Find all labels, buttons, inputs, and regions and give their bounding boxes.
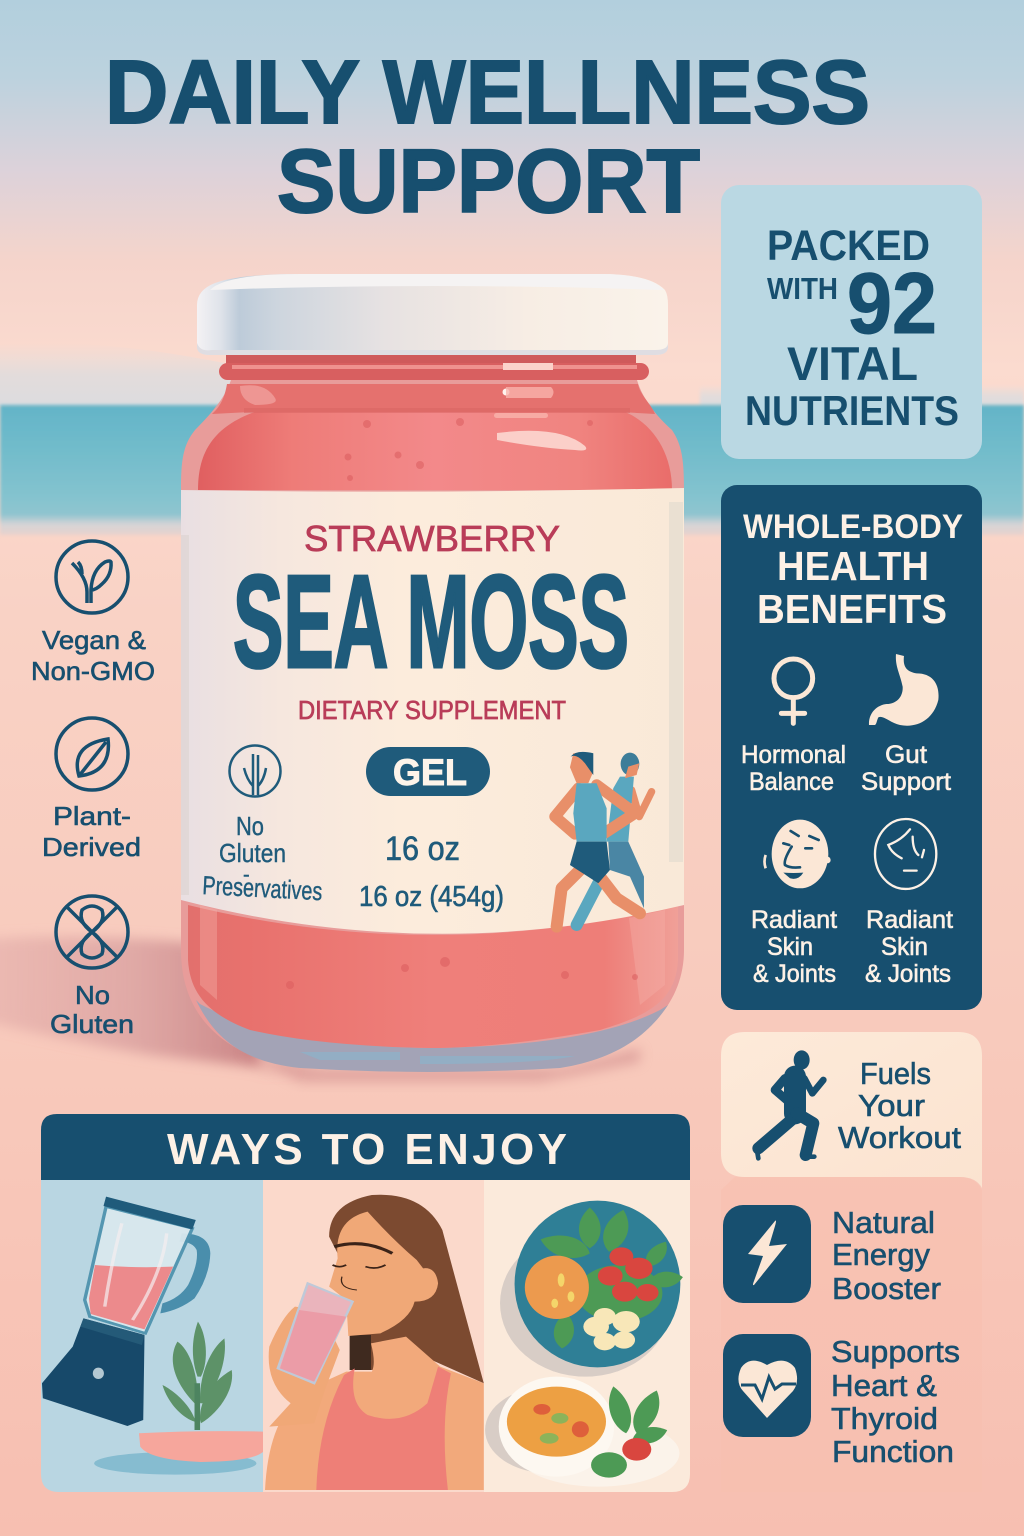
- label: gel pill: [366, 747, 490, 796]
- text: radiant skin and joints right: Radiant: [866, 906, 953, 934]
- badge: no gluten: No: [75, 980, 110, 1010]
- panel: packed with 92 vital nutrients: PACKED: [767, 222, 930, 270]
- icon: smiling face: [764, 820, 831, 888]
- item: natural energy booster: [723, 1205, 941, 1306]
- panel: packed with 92 vital nutrients: NUTRIENTS: [745, 387, 959, 434]
- text: radiant skin and joints right: [865, 906, 953, 988]
- text: gut support: Gut: [885, 741, 927, 769]
- panel: packed with 92 vital nutrients: [721, 185, 982, 459]
- item: supports heart and thyroid function: Supports: [831, 1334, 960, 1369]
- title: DAILY WELLNESS: [105, 43, 870, 143]
- text: radiant skin and joints left: Radiant: [751, 906, 837, 934]
- panel: ways to enjoy: [41, 1114, 690, 1492]
- text: hormonal balance: Balance: [749, 768, 834, 796]
- panel: fuels your workout: Your: [858, 1088, 925, 1123]
- text: radiant skin and joints left: Skin: [767, 933, 813, 961]
- panel: fuels your workout: Workout: [838, 1120, 961, 1155]
- panel: packed with 92 vital nutrients: 92: [847, 256, 937, 352]
- text: radiant skin and joints right: Skin: [881, 933, 928, 961]
- scene: salad plate and soup: [484, 1180, 690, 1492]
- panel heading: HEALTH: [777, 543, 929, 589]
- heading bar: [41, 1114, 690, 1180]
- icon: runner: [757, 1050, 823, 1158]
- badge: vegan and non-gmo: [31, 541, 155, 686]
- jar lid: [197, 274, 668, 355]
- icon: lightning bolt: [723, 1205, 811, 1303]
- badge: no gluten: [50, 896, 134, 1039]
- text: hormonal balance: [741, 741, 846, 796]
- panel: packed with 92 vital nutrients: VITAL: [787, 337, 918, 390]
- badge: no gluten: Gluten: [50, 1009, 134, 1039]
- product label: [181, 488, 684, 934]
- label: net weight: 16 oz (454g): [359, 881, 504, 913]
- scene: woman drinking smoothie: [263, 1180, 484, 1492]
- panel heading: BENEFITS: [757, 586, 947, 632]
- badge: vegan and non-gmo: Vegan &: [42, 625, 146, 655]
- icon: sprout: [56, 541, 128, 613]
- text: radiant skin and joints left: & Joints: [753, 960, 836, 988]
- label: net weight: 16 oz: [385, 830, 460, 868]
- jar neck: [219, 352, 649, 405]
- panel: fuels your workout: Fuels: [860, 1056, 931, 1091]
- icon: stomach: [869, 654, 939, 726]
- label: no gluten preservatives: [202, 811, 323, 906]
- gel highlights: [497, 431, 586, 450]
- label: runners illustration: [555, 752, 652, 927]
- label: no gluten preservatives: Gluten: [219, 838, 286, 868]
- label: strawberry: STRAWBERRY: [304, 518, 560, 559]
- title: SUPPORT: [277, 132, 700, 232]
- badge: vegan and non-gmo: Non-GMO: [31, 656, 155, 686]
- text: hormonal balance: Hormonal: [741, 741, 846, 769]
- panel: packed with 92 vital nutrients: WITH: [767, 271, 838, 306]
- gel upper: [198, 410, 672, 490]
- icon: face outline: [875, 819, 936, 889]
- product jar: [181, 274, 684, 1072]
- jar body with gel: [181, 376, 684, 1072]
- item: natural energy booster: Energy: [832, 1237, 930, 1272]
- icon: crossed grain: [56, 896, 128, 968]
- item: supports heart and thyroid function: Heart &: [831, 1368, 937, 1403]
- panel: whole-body health benefits: [721, 485, 982, 1010]
- text: gut support: [861, 741, 951, 796]
- item: supports heart and thyroid function: Function: [832, 1434, 954, 1469]
- gel lower: [188, 905, 678, 1048]
- label: gel pill: GEL: [393, 752, 467, 793]
- label: plant icon: [230, 746, 280, 796]
- item: supports heart and thyroid function: Thyroid: [831, 1401, 938, 1436]
- label: net weight: [359, 830, 504, 913]
- label: dietary supplement: DIETARY SUPPLEMENT: [298, 695, 566, 725]
- badge: plant-derived: Plant-: [53, 801, 131, 831]
- heading bar: WAYS TO ENJOY: [167, 1125, 567, 1174]
- panel heading: WHOLE-BODY: [743, 508, 963, 546]
- panel: lower benefits background: [721, 1177, 982, 1492]
- icon: female symbol: [774, 659, 813, 723]
- label: sea moss: SEA MOSS: [233, 548, 629, 695]
- title: [105, 43, 870, 232]
- item: natural energy booster: Natural: [832, 1205, 935, 1240]
- panel heading: [743, 508, 963, 632]
- item: natural energy booster: Booster: [832, 1271, 941, 1306]
- text: gut support: Support: [861, 768, 951, 796]
- label: no gluten preservatives: -: [243, 864, 250, 886]
- text: radiant skin and joints left: [751, 906, 837, 988]
- badge: plant-derived: [42, 718, 141, 862]
- text: radiant skin and joints right: & Joints: [865, 960, 951, 988]
- label: no gluten preservatives: No: [236, 811, 264, 841]
- badge: plant-derived: Derived: [42, 832, 141, 862]
- label: no gluten preservatives: Preservatives: [202, 870, 323, 906]
- icon: heart with pulse: [723, 1334, 811, 1437]
- item: supports heart and thyroid function: [723, 1334, 960, 1469]
- scene: blender and plant: [41, 1180, 265, 1492]
- glass base: [196, 1000, 668, 1072]
- icon: leaf: [56, 718, 128, 790]
- panel: fuels your workout: [721, 1032, 982, 1188]
